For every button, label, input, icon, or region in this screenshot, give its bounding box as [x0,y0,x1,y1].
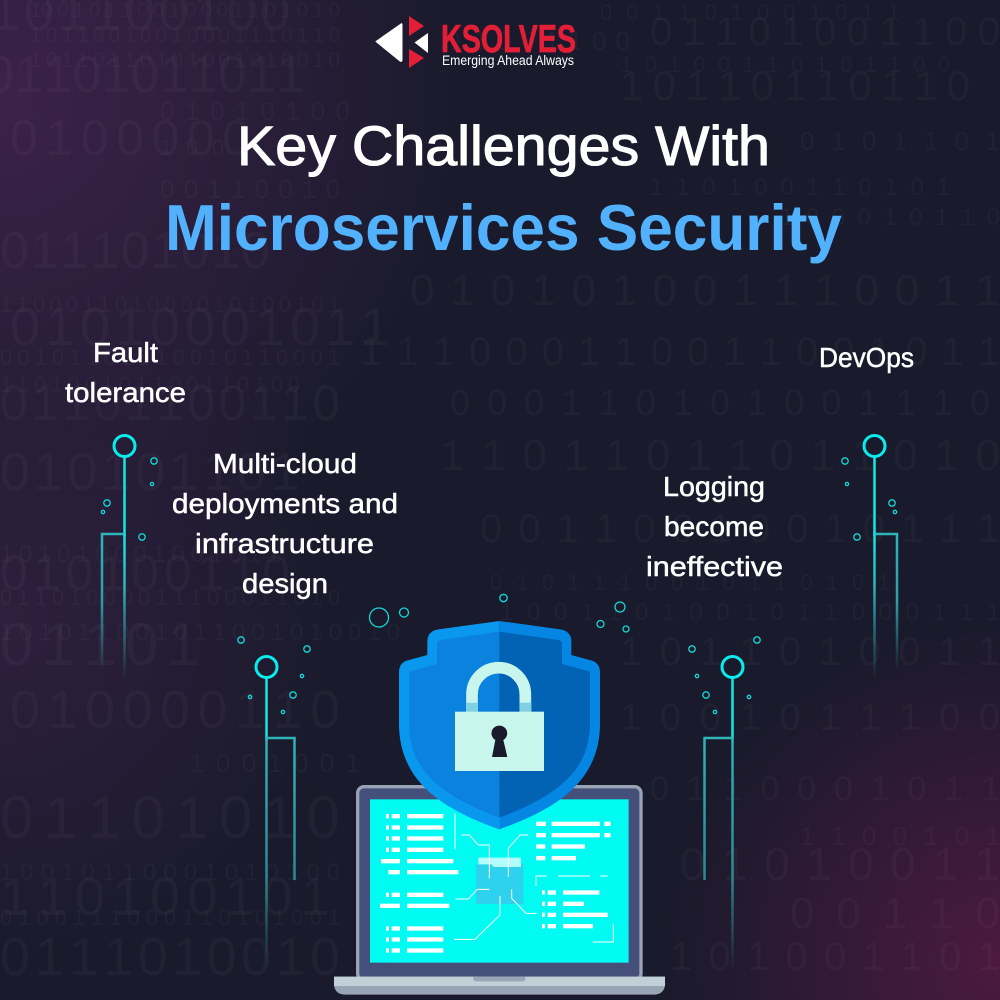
logo icon [376,16,428,68]
chip icon [476,858,523,904]
label: Multi-cloud deployments [172,448,398,599]
decorative bubbles around shield [370,594,629,632]
laptop [334,785,665,995]
label: Logging become ineffective: become [664,511,764,542]
background binary digits: 1 0 1 1 0 1 0 0 1 1 [620,630,1000,674]
connector: Multi-cloud [238,637,310,970]
background binary digits: 0 1 1 0 1 1 0 0 1 1 0 [0,375,340,431]
shield inner [409,632,499,818]
background binary digits: 0 1 0 1 0 0 1 1 [680,838,1000,890]
background binary digits: 0 1 1 1 0 1 0 0 1 0 [0,927,340,987]
padlock body [455,712,544,771]
background binary digits: 1 0 1 0 0 1 1 0 1 [670,935,1000,979]
code rows right [536,822,611,928]
background binary digits: 0 0 1 1 0 0 1 0 0 1 0 1 1 1 [480,507,1000,551]
code rows left [380,814,458,953]
background binary digits: 0 0 1 1 0 0 1 0 [160,174,340,204]
circuit lines [454,813,613,942]
background binary digits: 0 1 0 0 0 0 1 1 0 [10,680,340,740]
label: Fault tolerance: Fault [93,337,158,368]
background binary digits: 0 1 1 0 1 0 0 1 1 0 0 [650,10,1000,54]
laptop lid [356,785,643,982]
padlock shackle [472,668,525,712]
background binary digits: 1 0 1 0 1 0 0 0 1 0 0 1 0 1 1 [0,541,280,568]
keyhole [491,726,507,757]
background binary digits: 1 0 0 1 0 0 1 [190,748,360,778]
title line 2: Microservices Security [165,191,842,264]
background binary digits: 0 1 1 0 1 [0,611,200,678]
label: Multi-cloud deployments: Multi-cloud [213,448,357,479]
background binary digits: 1 0 1 1 0 1 1 0 1 0 1 0 0 1 0 1 0 0 1 0 [30,49,340,72]
laptop screen [370,799,629,963]
background binary digits: 1 1 0 1 1 0 1 1 0 1 1 0 1 0 [440,431,1000,480]
laptop base [334,977,665,995]
logo tagline: Emerging Ahead Always [442,53,574,68]
background binary digits: 0 1 0 1 1 1 0 0 1 0 1 1 0 1 0 1 [490,570,890,595]
label: Logging become ineffective: Logging [663,471,765,502]
background binary digits: 1 0 1 1 0 1 1 0 1 1 0 [620,62,970,109]
background binary digits: 1 0 1 1 0 0 1 0 0 1 0 0 0 1 1 1 0 1 1 0 [30,24,340,47]
background binary digits: 1 1 1 0 0 0 1 1 0 0 1 1 0 0 1 0 1 1 [360,330,1000,374]
padlock [455,668,544,771]
background binary digits: 0 0 1 1 0 [790,889,1000,938]
label: Multi-cloud deployments: infrastructure [195,528,374,559]
background binary digits: 1 1 0 0 1 1 0 0 [450,26,630,56]
shield with padlock [399,621,600,829]
connector: Fault tolerance [101,436,157,680]
background binary digits: 0 1 0 0 0 0 0 [10,110,250,166]
label: Multi-cloud deployments: design [242,568,328,599]
background binary digits: 0 1 0 1 0 1 0 0 [160,96,350,126]
background binary digits: 0 1 0 1 0 0 0 1 0 1 1 [10,297,390,357]
background binary digits: 1 0 1 0 1 1 0 0 1 0 1 1 0 0 1 0 1 0 0 1 0 [0,619,400,646]
background binary digits: 1 0 0 1 0 1 1 0 0 0 1 0 1 0 1 0 0 [0,859,340,886]
label: Fault tolerance: tolerance [65,377,186,408]
background binary digits: 0 1 0 1 1 0 1 [800,126,1000,156]
background binary digits: 1 1 0 1 0 0 1 0 1 [0,867,330,927]
background binary digits: 0 1 1 0 0 0 1 0 1 1 [650,770,1000,808]
background binary digits: 0 1 1 0 1 0 0 0 0 1 1 1 0 0 0 1 1 0 1 0 [0,585,340,610]
background binary digits: 0 1 1 1 0 1 0 1 0 [0,222,270,280]
logo: Ksolves [376,16,576,68]
background binary digits: 1 1 0 0 1 0 1 [800,821,1000,851]
background binary digits: 0 0 1 0 1 1 0 1 1 1 0 0 1 0 1 1 0 0 0 1 [0,345,340,370]
background binary digits: 0 1 1 0 1 0 1 0 [0,784,340,851]
background binary digits: 1 0 0 1 [160,135,250,160]
background binary digits: 1 0 0 1 0 1 1 1 0 0 [620,697,1000,739]
background binary digits: 1 0 0 0 1 0 1 1 0 [780,204,1000,231]
background binary digits: 0 0 1 1 0 1 0 0 1 0 1 1 [600,0,900,25]
background binary digits: 0 1 0 1 0 1 0 0 1 1 1 0 0 1 1 [410,266,1000,315]
background binary digits: 0 1 0 0 1 1 1 0 0 0 1 1 0 1 0 1 0 0 1 [0,905,340,930]
label: Fault tolerance [65,337,186,408]
background binary digits: 1 1 0 1 0 0 1 0 1 1 0 0 1 1 0 1 0 0 [0,372,300,397]
title line 1: Key Challenges With [237,114,770,177]
background binary digits: 1 1 0 0 0 1 1 0 1 0 0 0 0 1 0 1 0 0 1 0 1 [0,292,340,317]
background binary digits: 0 1 0 1 0 0 1 1 0 [0,545,290,601]
connector: Logging [689,637,760,970]
label: Logging become ineffective: ineffective [646,551,783,582]
label: Multi-cloud deployments: deployments and [172,488,398,519]
background binary digits: 1 0 1 0 0 1 1 0 1 0 1 1 0 0 [620,52,950,77]
background binary digits: 0 1 0 1 0 1 1 0 1 [0,442,300,502]
label: DevOps: DevOps [819,342,914,373]
background binary digits: 0 0 0 1 1 0 1 0 1 0 0 1 1 1 0 [450,382,990,423]
label: Logging become ineffective [646,471,783,582]
connector: DevOps [842,436,897,680]
background binary digits: 1 1 0 1 0 0 1 1 0 1 0 1 [650,174,950,201]
shield outer [399,621,499,829]
background binary digits: 1 0 0 1 1 0 1 0 0 1 0 1 1 0 0 0 1 1 1 [500,599,1000,626]
logo wordmark: KSOLVES [441,18,576,61]
